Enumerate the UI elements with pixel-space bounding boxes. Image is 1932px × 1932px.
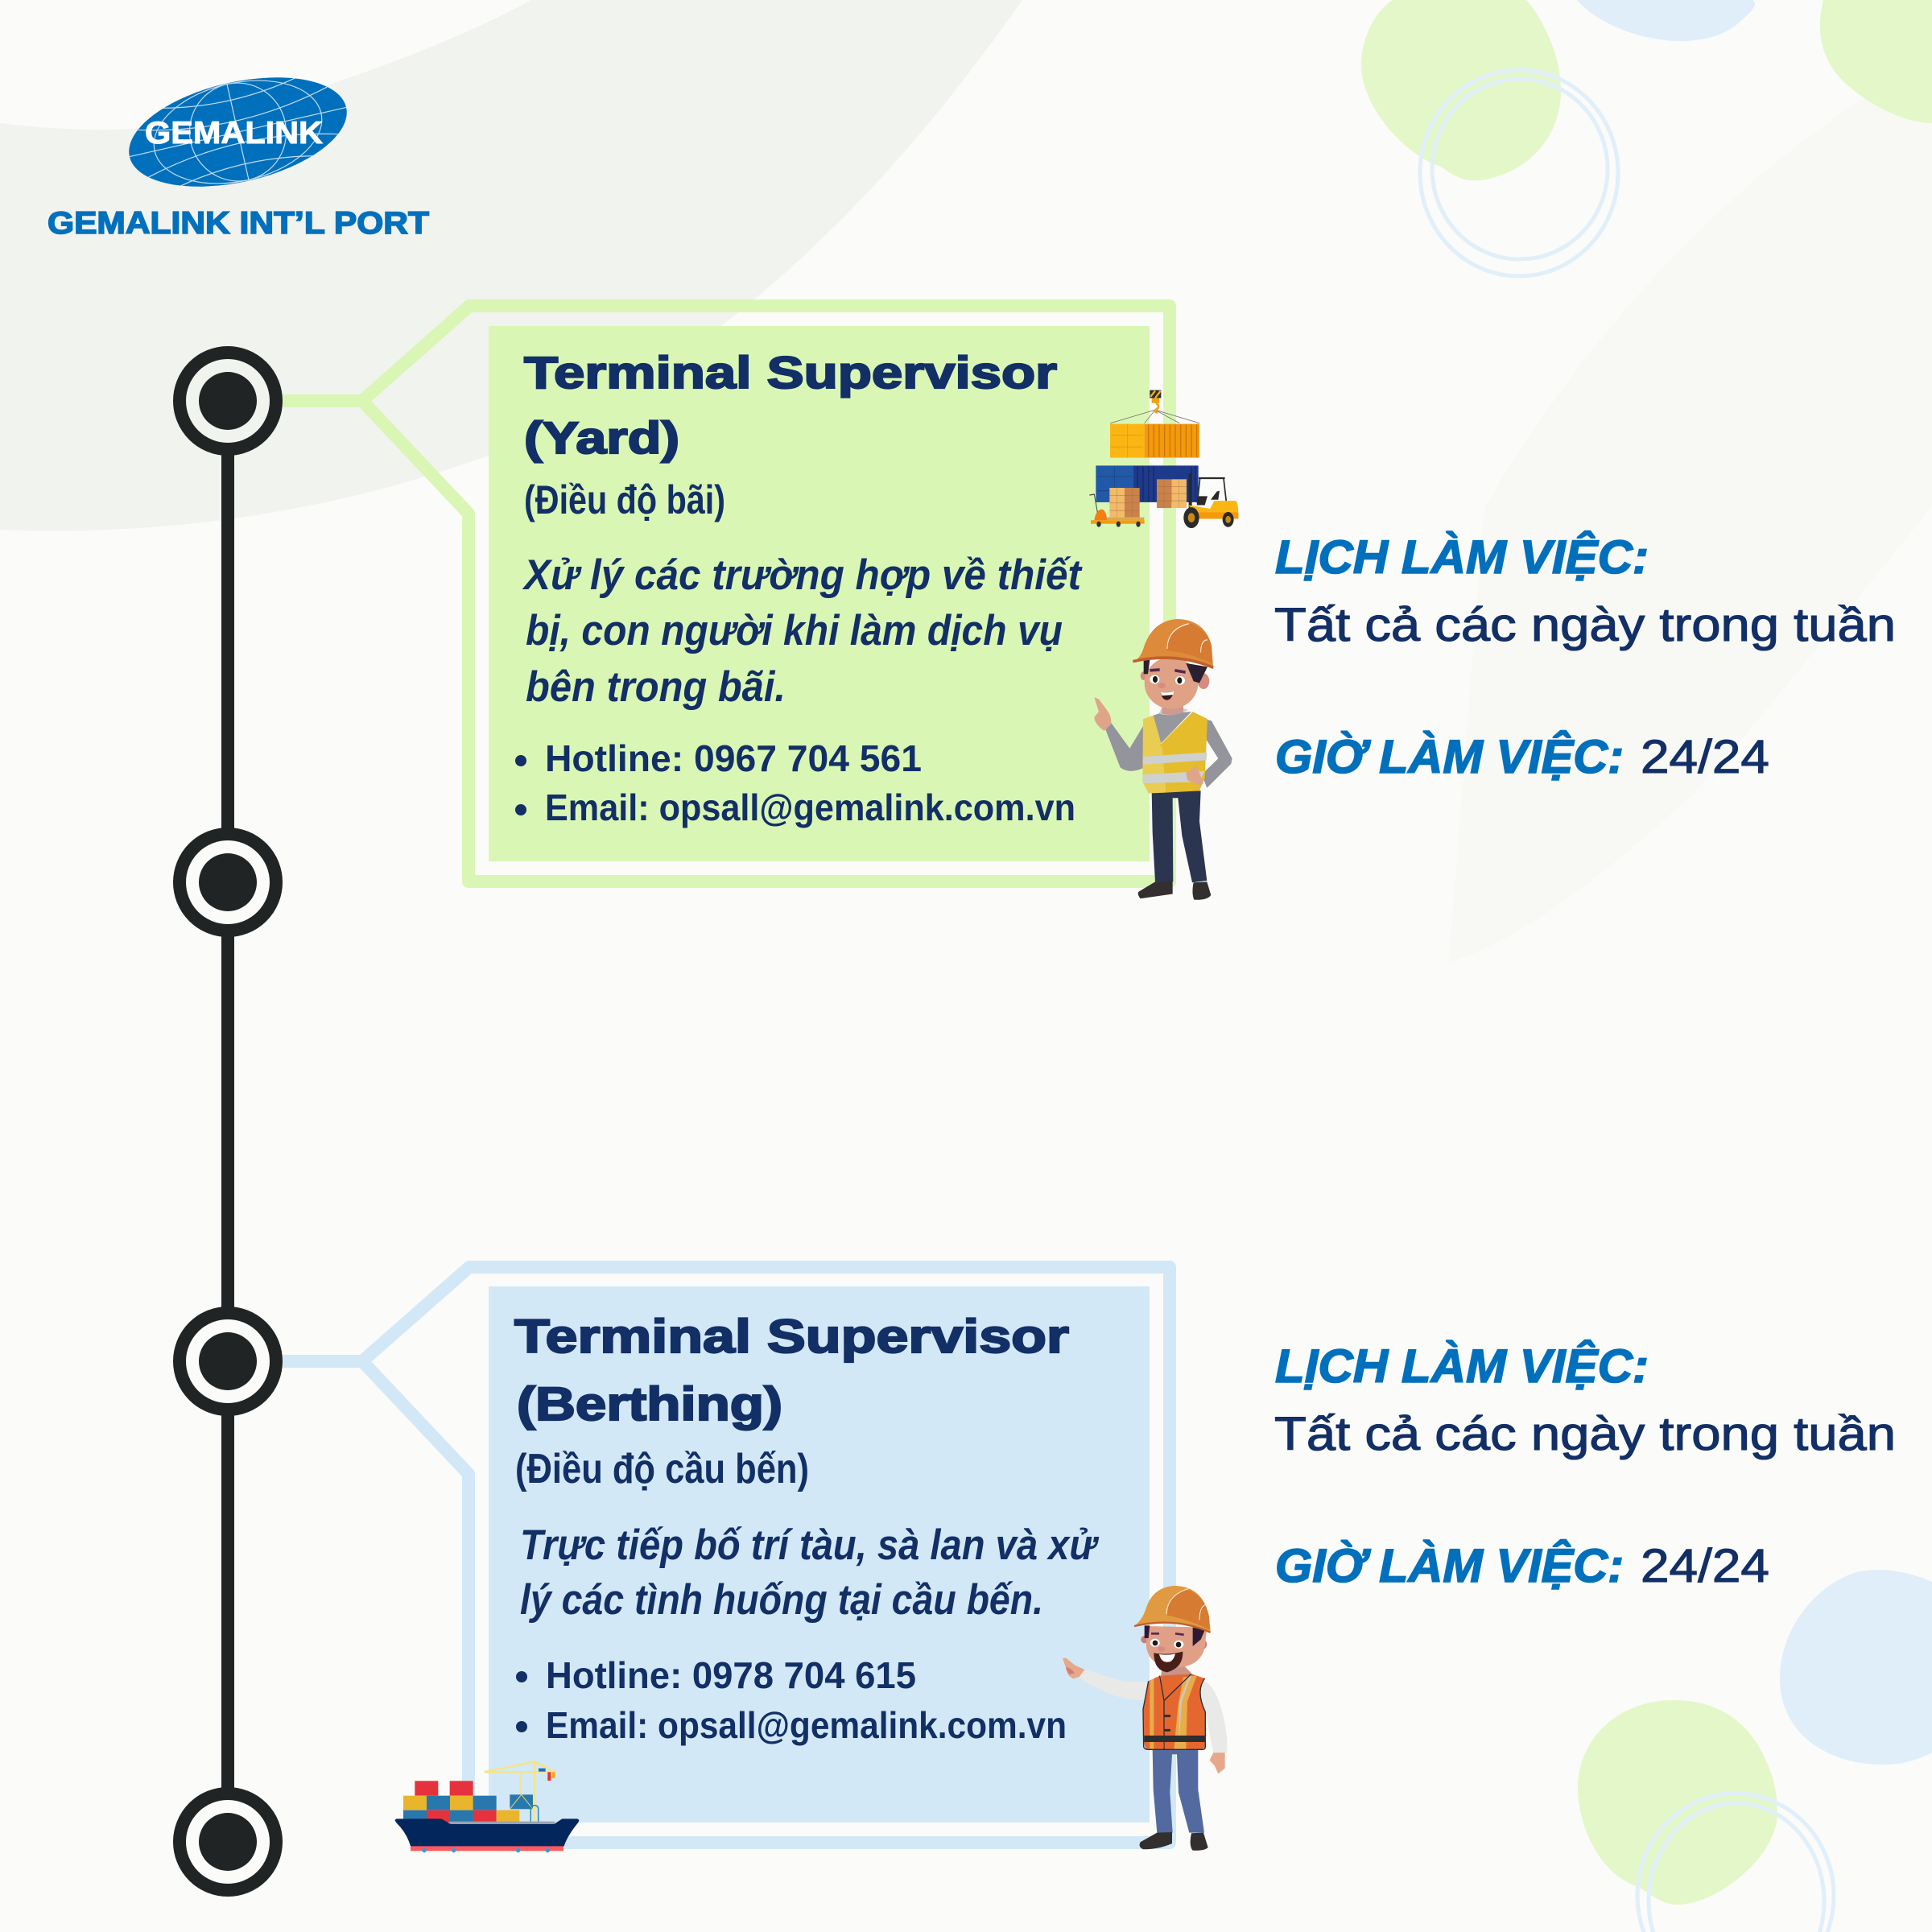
text block: yard schedule	[1274, 531, 1896, 783]
decorative blue blob top	[1577, 0, 1755, 41]
yard description	[522, 551, 1083, 711]
yard heading: (Yard)	[524, 412, 679, 463]
icon: containers and forklift	[1089, 390, 1238, 528]
yard contacts: Email: opsall@gemalink.com.vn	[545, 786, 1075, 828]
text block: berthing schedule	[1274, 1340, 1896, 1592]
berthing heading	[514, 1311, 1069, 1430]
text block: berthing schedule: 24/24	[1641, 1540, 1769, 1592]
logo wordmark: GEMALINK	[145, 116, 323, 151]
text block: berthing schedule: LỊCH LÀM VIỆC:	[1275, 1340, 1649, 1393]
yard contacts: Hotline: 0967 704 561	[545, 737, 922, 779]
yard connector and outline	[283, 306, 1170, 881]
decorative rings bottom	[1637, 1794, 1834, 1932]
icon: container ship	[395, 1761, 579, 1852]
text block: yard schedule: GIỜ LÀM VIỆC:	[1275, 731, 1624, 783]
yard heading	[524, 347, 1057, 463]
text block: berthing schedule: GIỜ LÀM VIỆC:	[1275, 1540, 1624, 1592]
timeline node 4	[180, 1794, 276, 1890]
decorative rings top	[1420, 70, 1618, 276]
berthing connector and outline	[283, 1267, 1170, 1843]
timeline node 2	[180, 834, 276, 931]
timeline node 3	[180, 1313, 276, 1410]
text block: yard schedule: Tất cả các ngày trong tuần	[1274, 599, 1896, 651]
yard heading: Terminal Supervisor	[524, 347, 1057, 398]
timeline node 1	[180, 353, 276, 449]
berthing panel fill	[489, 1286, 1150, 1823]
logo	[47, 59, 429, 241]
decorative green blob top right	[1820, 0, 1932, 123]
berthing description: lý các tình huống tại cầu bến.	[520, 1576, 1043, 1624]
panel: berthing	[283, 1267, 1170, 1843]
yard description: bị, con người khi làm dịch vụ	[526, 607, 1063, 654]
timeline	[180, 353, 276, 1890]
icon: worker in yellow vest	[1094, 619, 1232, 900]
berthing contacts: Email: opsall@gemalink.com.vn	[546, 1704, 1067, 1746]
yard contacts	[515, 737, 1075, 828]
berthing contacts	[516, 1654, 1067, 1746]
berthing description	[520, 1521, 1100, 1624]
decorative green blob top	[1361, 0, 1561, 180]
yard panel fill	[489, 326, 1150, 861]
yard description: bên trong bãi.	[526, 663, 786, 711]
yard description: Xử lý các trường hợp về thiết	[522, 551, 1083, 599]
panel: yard	[283, 306, 1170, 881]
berthing heading: (Berthing)	[517, 1378, 782, 1430]
decorative blue blob bottom right	[1780, 1570, 1932, 1765]
text block: yard schedule: LỊCH LÀM VIỆC:	[1275, 531, 1649, 584]
logo caption: GEMALINK INT’L PORT	[47, 206, 429, 241]
berthing contacts: Hotline: 0978 704 615	[546, 1654, 916, 1696]
icon: worker in orange vest	[1063, 1586, 1227, 1851]
text block: yard schedule: 24/24	[1641, 731, 1769, 783]
berthing description: Trực tiếp bố trí tàu, sà lan và xử	[520, 1521, 1100, 1569]
yard subheading: (Điều độ bãi)	[524, 477, 725, 522]
berthing subheading: (Điều độ cầu bến)	[515, 1446, 809, 1492]
decorative green blob bottom right	[1578, 1700, 1777, 1905]
text block: berthing schedule: Tất cả các ngày trong tuần	[1274, 1408, 1896, 1460]
berthing heading: Terminal Supervisor	[514, 1311, 1069, 1363]
logo globe	[118, 59, 357, 205]
